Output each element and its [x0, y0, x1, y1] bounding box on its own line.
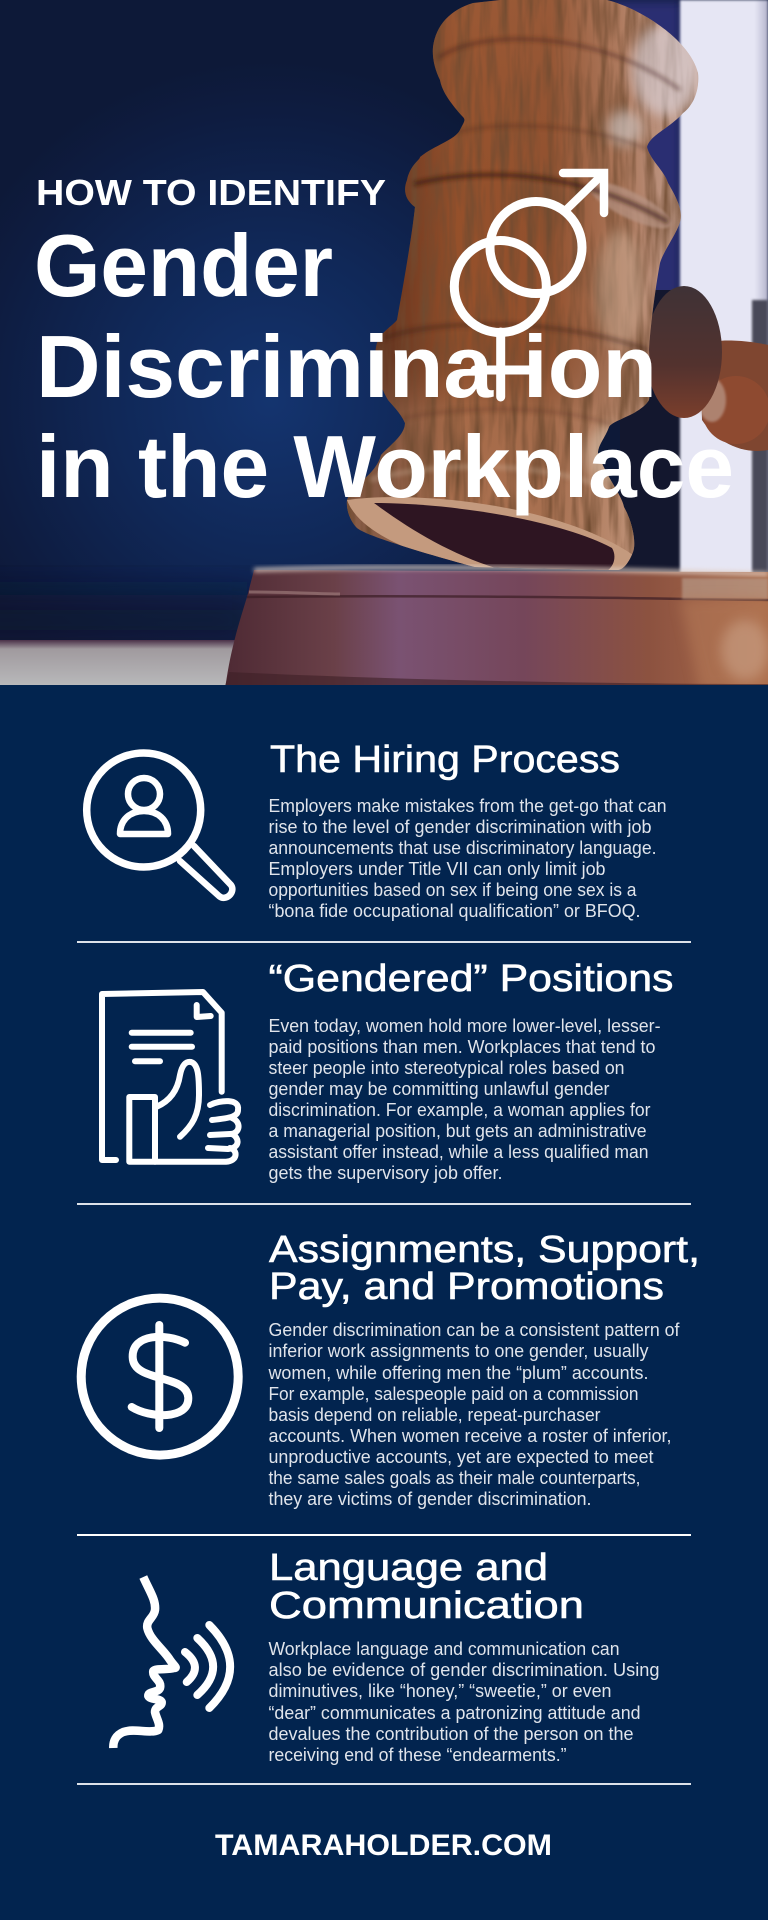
body text: assignments: accounts. When women receive a roster of inferior,: [268, 1426, 672, 1446]
body text: language and communication: “dear” communicates a patronizing attitude and: [268, 1703, 640, 1723]
body text: gendered positions: a managerial position, but gets an administrative: [268, 1121, 646, 1141]
body text: gendered positions: assistant offer instead, while a less qualified man: [268, 1142, 648, 1162]
body text: language and communication: receiving end of these “endearments.”: [268, 1745, 567, 1765]
icon: dollar coin: [81, 1298, 238, 1455]
body text: gendered positions: gender may be committing unlawful gender: [268, 1079, 610, 1099]
heading: language and communication: Communication: [269, 1585, 584, 1627]
body text: the hiring process: announcements that use discriminatory language.: [268, 838, 656, 858]
title line: discrimination: Discrimination: [36, 317, 657, 416]
divider: [77, 941, 691, 943]
heading: assignments, support, pay, and promotions: Assignments, Support,: [269, 1229, 700, 1271]
gavel head: [340, 0, 710, 580]
hero photo: gavel on sounding block: [0, 0, 768, 690]
body text: assignments: unproductive accounts, yet are expected to meet: [268, 1447, 654, 1467]
section: language and communication: [268, 1547, 660, 1765]
body text: assignments: they are victims of gender discrimination.: [268, 1489, 592, 1509]
body text: assignments: inferior work assignments to one gender, usually: [268, 1341, 648, 1361]
body text: assignments: basis depend on reliable, repeat-purchaser: [268, 1405, 600, 1425]
section: the hiring process: [268, 739, 666, 921]
body text: gendered positions: Even today, women hold more lower-level, lesser-: [268, 1016, 660, 1036]
footer: website: TAMARAHOLDER.COM: [215, 1829, 552, 1862]
heading: assignments, support, pay, and promotions: Pay, and Promotions: [269, 1266, 664, 1308]
icon: speaking face profile: [113, 1577, 230, 1748]
heading: the hiring process: The Hiring Process: [270, 739, 620, 781]
heading: gendered positions: “Gendered” Positions: [268, 958, 674, 1000]
body text: the hiring process: opportunities based on sex if being one sex is a: [268, 880, 637, 900]
title eyebrow: how to identify: HOW TO IDENTIFY: [36, 172, 386, 213]
body text: language and communication: devalues the contribution of the person on the: [268, 1724, 634, 1744]
body text: gendered positions: discrimination. For example, a woman applies for: [268, 1100, 650, 1120]
body text: assignments: women, while offering men the “plum” accounts.: [268, 1363, 648, 1383]
body text: assignments: [268, 1320, 680, 1509]
title line: gender: Gender: [34, 216, 333, 315]
section: gendered positions: [268, 958, 674, 1183]
gavel handle: [646, 286, 768, 451]
sounding block: [225, 567, 768, 690]
section: assignments, support, pay, and promotions: [268, 1229, 700, 1509]
body text: gendered positions: gets the supervisory job offer.: [268, 1163, 502, 1183]
body text: the hiring process: [268, 796, 666, 921]
title line: in the workplace: in the Workplace: [36, 417, 734, 516]
body text: the hiring process: Employers under Title VII can only limit job: [268, 859, 606, 879]
body text: language and communication: Workplace language and communication can: [268, 1639, 620, 1659]
body text: gendered positions: [268, 1016, 660, 1183]
body text: language and communication: diminutives, like “honey,” “sweetie,” or even: [268, 1681, 612, 1701]
body text: the hiring process: rise to the level of gender discrimination with job: [268, 817, 652, 837]
icon: intertwined gender symbols: [454, 173, 604, 397]
body text: language and communication: [268, 1639, 660, 1765]
body text: the hiring process: Employers make mistakes from the get-go that can: [268, 796, 666, 816]
body text: gendered positions: paid positions than men. Workplaces that tend to: [268, 1037, 656, 1057]
body text: gendered positions: steer people into stereotypical roles based on: [268, 1058, 624, 1078]
heading: language and communication: Language and: [269, 1547, 548, 1589]
body text: assignments: For example, salespeople paid on a commission: [268, 1384, 638, 1404]
icon: magnifying glass over person: [87, 753, 232, 898]
icon: document with thumbs up: [102, 992, 239, 1162]
body text: language and communication: also be evidence of gender discrimination. Using: [268, 1660, 660, 1680]
title: [34, 172, 734, 516]
body text: the hiring process: “bona fide occupational qualification” or BFOQ.: [268, 901, 640, 921]
body text: assignments: Gender discrimination can be a consistent pattern of: [268, 1320, 680, 1340]
body text: assignments: the same sales goals as their male counterparts,: [268, 1468, 640, 1488]
heading: language and communication: [269, 1547, 584, 1627]
heading: assignments, support, pay, and promotions: [269, 1229, 700, 1308]
